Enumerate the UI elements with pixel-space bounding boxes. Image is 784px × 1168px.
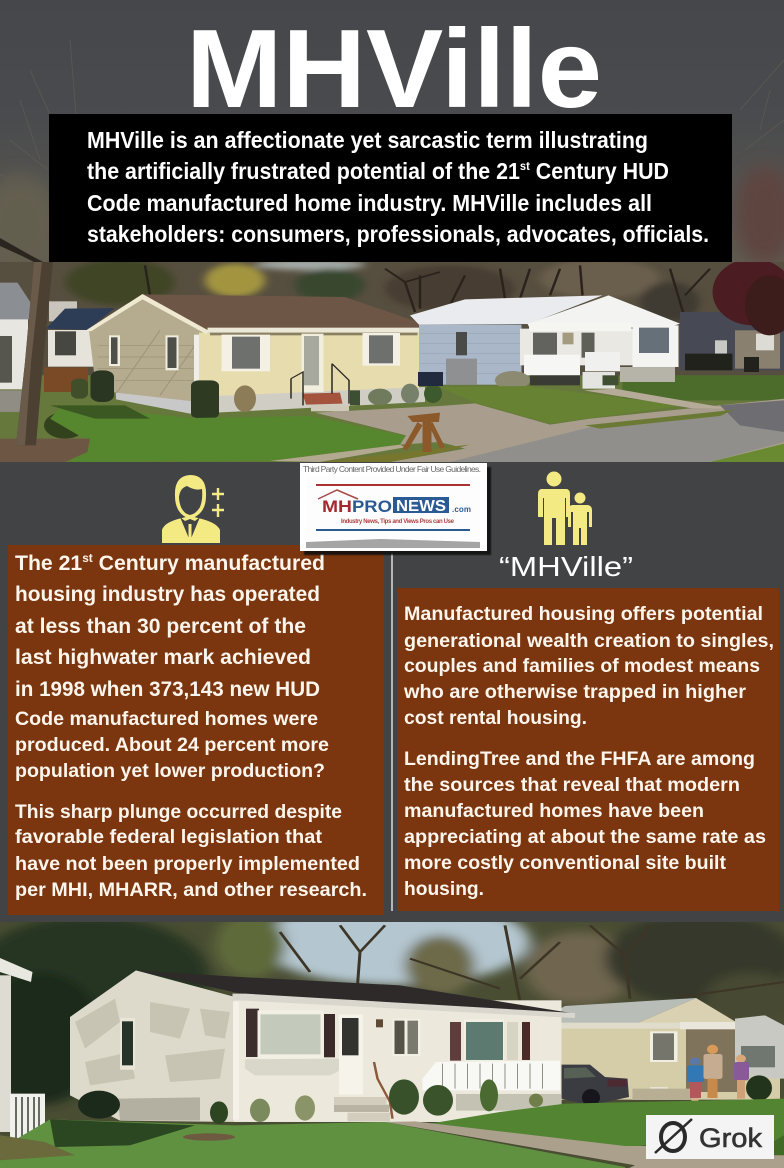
panel: left text: last highwater mark achieved: [15, 645, 311, 669]
logo card: MHProNews: .com: [452, 505, 471, 514]
neighbor house at right: [540, 1028, 780, 1100]
white house: [419, 325, 522, 385]
wooden sign: [402, 413, 445, 452]
intro text panel: Century HUD: [530, 158, 669, 184]
panel: right text: manufactured homes have been: [404, 800, 704, 822]
brown house gable: [89, 300, 204, 402]
logo card: MHProNews: NEWS: [396, 498, 446, 515]
panel: right text: more costly conventional site built: [404, 852, 727, 874]
divider between columns: [391, 553, 393, 911]
badge: Grok: [646, 1115, 774, 1159]
tree trunk in foreground: [16, 262, 53, 445]
porch rail and lattice: [422, 1061, 560, 1090]
panel: right text: couples and families of modest means: [404, 655, 760, 677]
photo: two houses on a street: [0, 259, 784, 462]
photo: white house and neighbor with family: [0, 899, 784, 1168]
panel: left text: Century manufactured: [93, 551, 325, 575]
bushes: [78, 1091, 120, 1119]
panel: right text: the sources that reveal that modern: [404, 774, 740, 796]
title: MHVille: [186, 7, 602, 131]
panel: right text: housing.: [404, 878, 484, 900]
driveway and road: [315, 399, 784, 462]
panel: right text: LendingTree and the FHFA are among: [404, 748, 755, 770]
panel: right text: appreciating at about the same rate as: [404, 826, 766, 848]
windows and door: [246, 1009, 259, 1057]
intro text panel: stakeholders: consumers, professionals, advocates, officials.: [87, 221, 709, 247]
far-right houses and red tree: [680, 312, 784, 370]
logo card: MHProNews: PRO: [352, 497, 392, 516]
brown house front: [199, 333, 419, 398]
panel: right text: who are otherwise trapped in higher: [403, 681, 746, 703]
panel: left text: [8, 545, 384, 915]
heading: MHVille in quotes: “MHVille”: [499, 551, 633, 582]
intro text panel: MHVille is an affectionate yet sarcastic term illustrating: [87, 127, 648, 153]
logo card: MHProNews: MH: [322, 497, 352, 516]
left house: [0, 283, 32, 319]
fair use notice: Third Party Content Provided Under Fair Use Guidelines.: [303, 464, 481, 474]
icon: adult and child: [538, 472, 592, 545]
panel: left text: in 1998 when 373,143 new HUD: [15, 677, 320, 701]
panel: right text: generational wealth creation to singles,: [404, 630, 774, 652]
steps: [334, 1097, 386, 1104]
second small house: [49, 301, 77, 321]
panel: right text: Manufactured housing offers potential: [404, 603, 763, 625]
intro text panel: st: [520, 159, 530, 173]
icon: professional person with sparkles: [162, 475, 224, 543]
pickup truck: [561, 1065, 629, 1105]
main house side wall: [70, 970, 240, 1122]
intro text panel: the artificially frustrated potential of the 21: [87, 158, 552, 184]
panel: left text: per MHI, MHARR, and other research.: [15, 879, 367, 901]
main house front: [234, 1000, 562, 1122]
logo card: MHProNews: Industry News, Tips and Views Pros can Use: [341, 519, 455, 525]
panel: left text: have not been properly implemented: [15, 853, 360, 875]
panel: left text: produced. About 24 percent more: [15, 734, 329, 756]
panel: right text: cost rental housing.: [404, 707, 587, 729]
bushes: [191, 380, 219, 419]
left neighbor house: [0, 958, 32, 982]
main house roof: [136, 970, 575, 1014]
panel: left text: This sharp plunge occurred despite: [15, 801, 342, 823]
panel: left text: st: [82, 551, 93, 565]
brown house roof: [142, 294, 434, 331]
panel: left text: at less than 30 percent of the: [15, 614, 306, 638]
panel: left text: The 21: [15, 551, 83, 575]
panel: right text: [397, 588, 779, 911]
family figures: [687, 1045, 749, 1103]
panel: left text: housing industry has operated: [15, 582, 320, 606]
header backdrop: faded trees: [0, 0, 784, 275]
intro text panel: Code manufactured home industry. MHVille includes all: [87, 190, 652, 216]
panel: left text: Code manufactured homes were: [15, 708, 318, 730]
lawns: [50, 405, 406, 462]
ground base: [0, 375, 784, 462]
panel: left text: population yet lower production?: [15, 760, 325, 782]
intro text panel: [49, 114, 732, 262]
logo card: MHProNews: [300, 463, 491, 555]
badge: Grok: Grok: [699, 1123, 763, 1153]
panel: left text: favorable federal legislation that: [15, 826, 323, 848]
lawns: [0, 1119, 625, 1168]
